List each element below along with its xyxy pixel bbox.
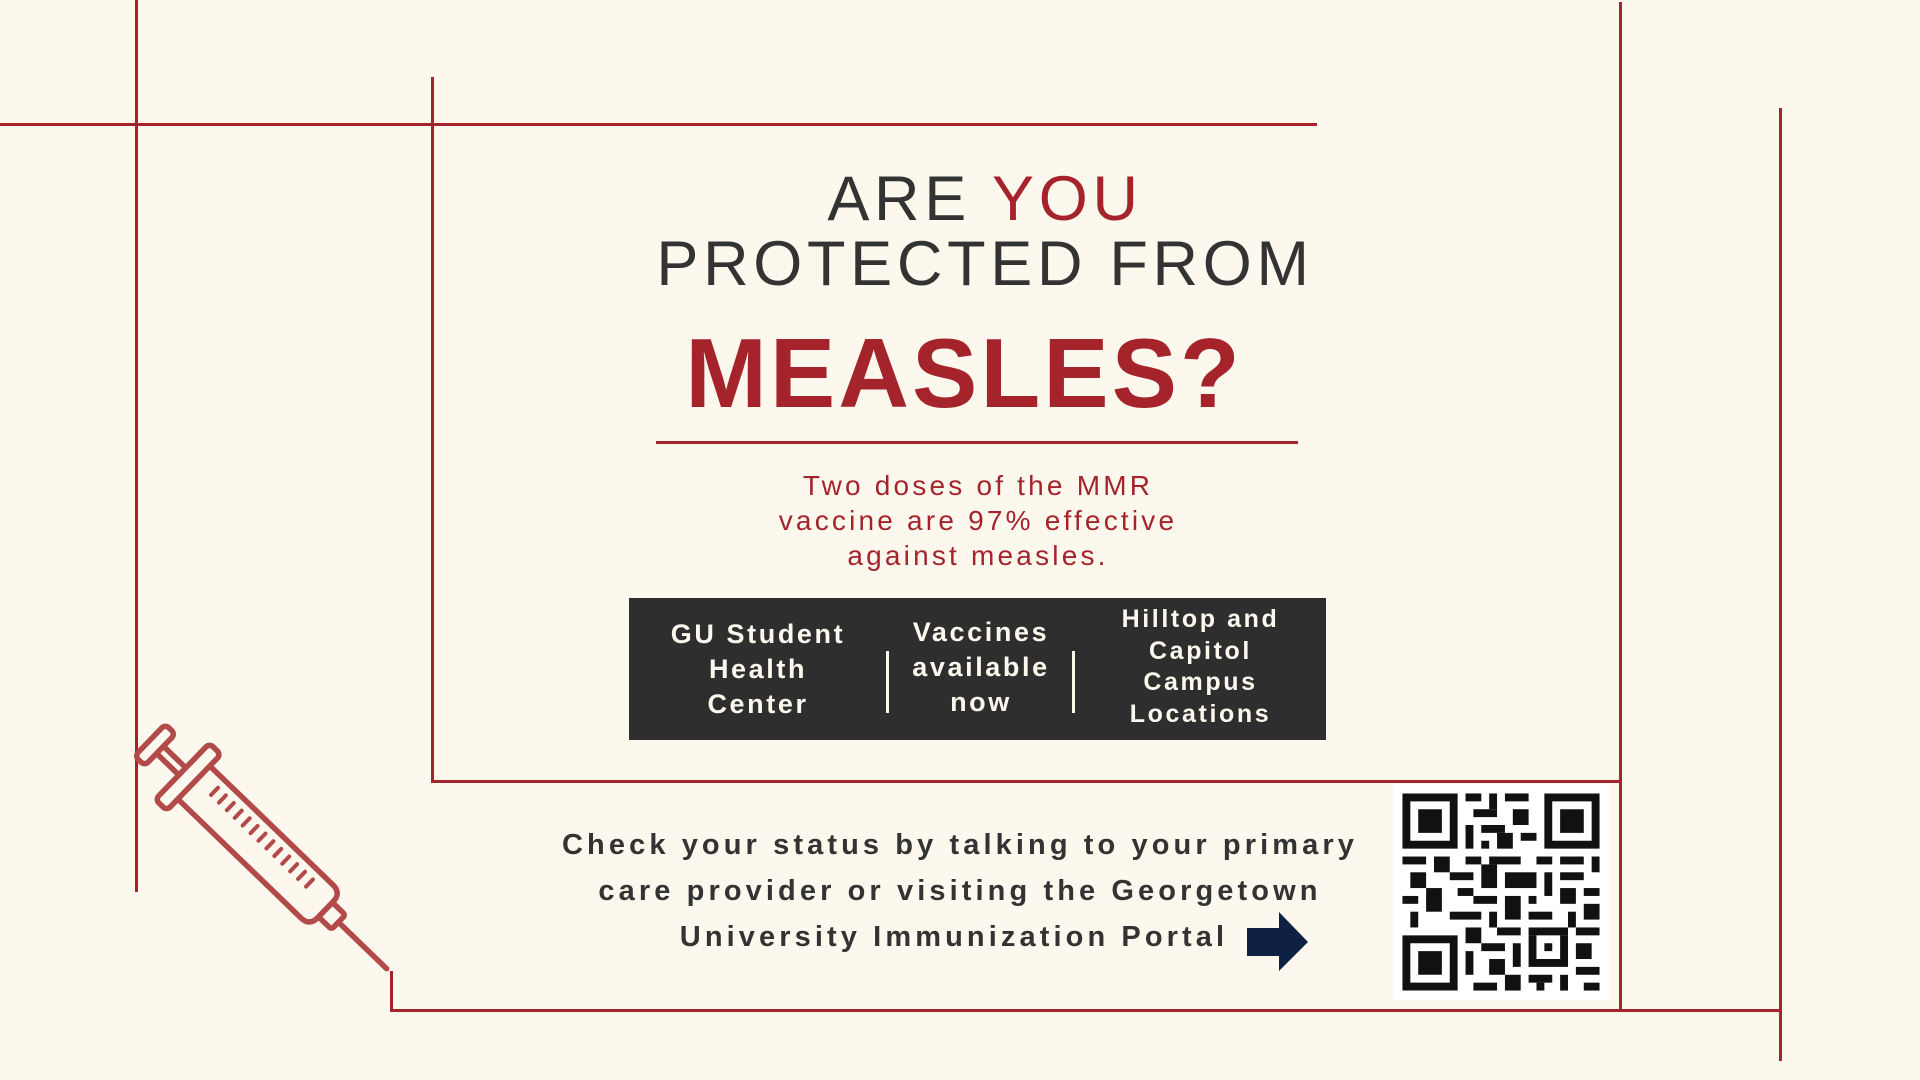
box column 3: Hilltop and <box>1122 605 1279 633</box>
subtitle: against measles. <box>847 540 1109 571</box>
box column 2: Vaccines <box>913 617 1049 647</box>
underline <box>656 441 1298 444</box>
box column 3: Locations <box>1130 700 1271 728</box>
title <box>656 164 1314 299</box>
box column 1: GU Student <box>671 619 845 649</box>
box column 1: Health <box>709 654 807 684</box>
box column 2: now <box>950 687 1012 717</box>
icon: syringe <box>134 724 390 972</box>
subtitle: vaccine are 97% effective <box>779 505 1177 536</box>
bottom text <box>562 829 1358 953</box>
bottom text: Check your status by talking to your primary <box>562 829 1358 861</box>
box column 2: available <box>912 652 1050 682</box>
subtitle <box>778 470 1177 571</box>
box column 1 <box>671 619 845 719</box>
box column 2 <box>912 617 1050 717</box>
heading: measles: MEASLES? <box>685 318 1243 428</box>
bottom text: University Immunization Portal <box>680 921 1228 953</box>
icon: arrow <box>1247 912 1308 971</box>
title: ARE YOU <box>827 164 1143 234</box>
title: PROTECTED FROM <box>656 229 1314 299</box>
box column 3 <box>1122 605 1279 728</box>
subtitle: Two doses of the MMR <box>803 470 1153 501</box>
QR code <box>1393 784 1609 1000</box>
box column 1: Center <box>707 689 809 719</box>
box column 3: Campus <box>1143 668 1258 696</box>
bottom text: care provider or visiting the Georgetown <box>598 875 1322 907</box>
box column 3: Capitol <box>1149 636 1252 664</box>
info box <box>629 598 1326 740</box>
